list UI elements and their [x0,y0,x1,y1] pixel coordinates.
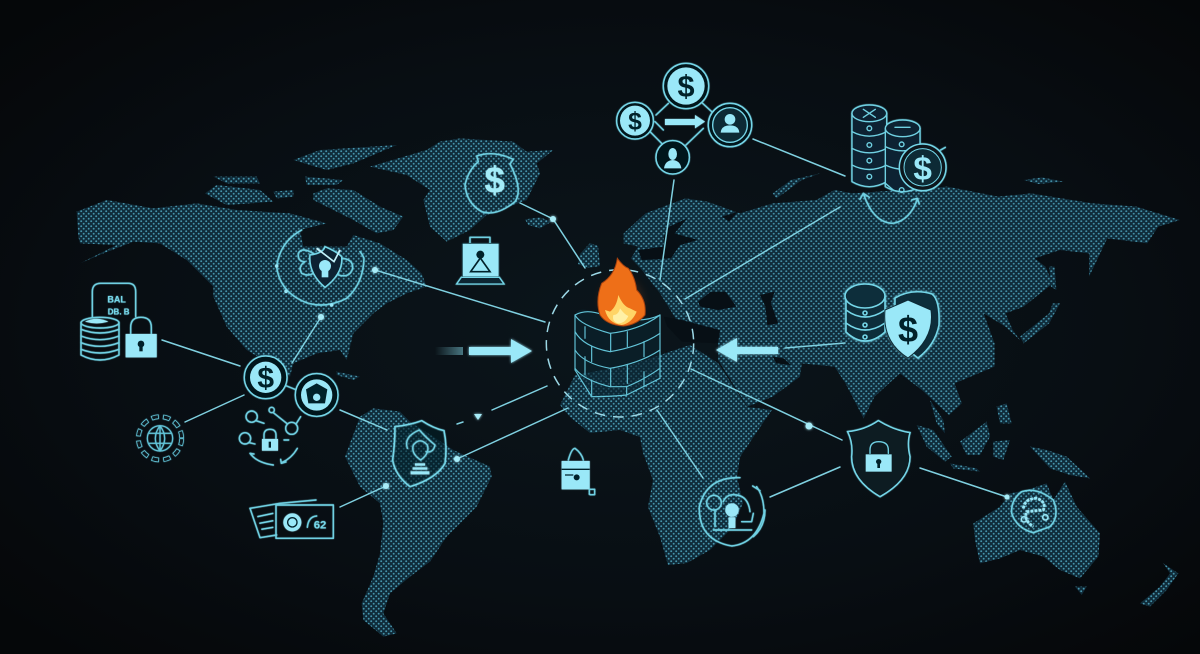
icon: laptop with warning [457,237,504,284]
icon: balance document [92,283,136,317]
icon: Greenland money bag: $ [484,160,505,201]
icon: North America shield badge [275,230,364,307]
continent: Australia and Southeast Asia [917,400,1178,607]
icon: padlock [126,317,157,357]
arrow: pointing left into firewall [716,338,778,362]
icon: search lock cycle [239,407,301,465]
icon: globe gear [138,417,182,460]
icon: cycle arrows [860,193,919,223]
British Isles [578,243,600,268]
icon: coin stack [81,317,119,360]
icon: dollar coin: $ [257,362,274,395]
icon: transfer arrow [665,115,705,128]
icon: Africa search and cloud badge [699,478,765,546]
icon: South America bulb shield [393,421,446,487]
icon: Greenland money bag [465,154,518,213]
icon: database with coin: $ [913,151,932,188]
icon: database with coin [852,105,946,223]
icon: dollar coin [244,356,287,399]
arrow: pointing right into firewall [435,339,532,363]
connector lines [162,139,1007,507]
brick tower [575,310,660,397]
continent: Africa [560,345,772,565]
icon: database with dollar shield [845,284,939,358]
icon: bank cards and certificate [250,500,333,538]
icon: Australia network badge [1012,490,1056,533]
world map [77,138,1180,637]
icon: bottom person [656,141,689,174]
firewall with flame [546,258,694,417]
flame glow [602,280,642,320]
icon: Atlantic briefcase [562,448,595,495]
icon: house coin [287,374,338,416]
icon: right person [708,103,752,147]
icon: shield with padlock [848,421,910,497]
connector nodes [318,216,1010,500]
icon: balance document: DB. B [108,307,130,316]
icon: balance document: BAL [107,294,126,304]
flame [598,258,645,326]
icon: bank cards and certificate: 62 [314,519,326,531]
icon: left dollar coin: $ [628,108,642,135]
icon cluster: left side [81,283,338,465]
continent: North America and Greenland [77,138,553,380]
continent: South America [345,408,492,637]
icon: top dollar coin: $ [677,70,695,104]
icon: database with dollar shield: $ [898,309,918,350]
icon cluster: payment network [617,63,752,174]
dashed ring [546,270,694,417]
continent: Eurasia [624,173,1180,418]
